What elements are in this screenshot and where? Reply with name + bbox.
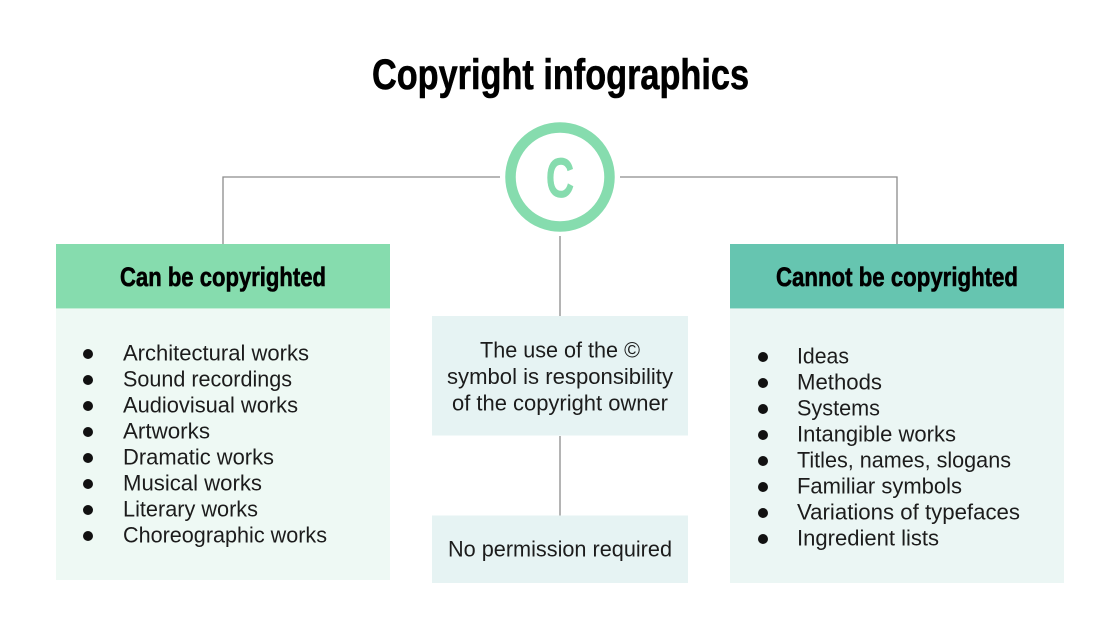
list: non-copyrightable items xyxy=(758,344,1020,550)
list: copyrightable works: Artworks xyxy=(123,418,210,444)
connector: circle to right panel xyxy=(620,177,897,244)
callout: no permission required: No permission required xyxy=(448,536,672,562)
list: copyrightable works: Musical works xyxy=(123,470,262,496)
list: non-copyrightable items: Titles, names, slogans xyxy=(797,448,1011,472)
callout: symbol responsibility: of the copyright owner xyxy=(452,390,668,416)
title: Copyright infographics xyxy=(372,51,749,99)
list: copyrightable works: Audiovisual works xyxy=(123,392,298,418)
panel: cannot be copyrighted xyxy=(730,244,1064,583)
list: non-copyrightable items: Systems xyxy=(797,396,880,420)
callout: symbol responsibility xyxy=(432,316,688,436)
connector: circle to left panel xyxy=(223,177,500,244)
panel header: Can be copyrighted xyxy=(120,262,326,292)
panel header: Cannot be copyrighted xyxy=(776,262,1018,292)
connector: circle to usage box xyxy=(559,236,561,316)
panel body xyxy=(730,309,1064,583)
panel body xyxy=(56,309,390,580)
list: copyrightable works: Sound recordings xyxy=(123,366,292,392)
list: non-copyrightable items: Intangible works xyxy=(797,422,956,446)
icon: copyright circle xyxy=(510,128,610,226)
panel: can be copyrighted xyxy=(56,244,390,580)
panel header xyxy=(730,244,1064,308)
list: copyrightable works xyxy=(83,340,327,548)
list: copyrightable works: Choreographic works xyxy=(123,522,327,548)
icon: copyright circle: C xyxy=(546,146,574,209)
list: non-copyrightable items: Familiar symbols xyxy=(797,474,962,498)
panel header xyxy=(56,244,390,308)
list: non-copyrightable items: Methods xyxy=(797,370,882,394)
callout: no permission required xyxy=(432,516,688,583)
callout: symbol responsibility: symbol is responsibility xyxy=(447,364,673,389)
list: non-copyrightable items: Ideas xyxy=(797,344,849,368)
connector: usage box to permission box xyxy=(559,436,561,516)
list: copyrightable works: Architectural works xyxy=(123,340,309,366)
list: copyrightable works: Literary works xyxy=(123,496,258,522)
callout: symbol responsibility: The use of the © xyxy=(480,338,640,362)
list: copyrightable works: Dramatic works xyxy=(123,444,274,470)
list: non-copyrightable items: Variations of typefaces xyxy=(797,500,1020,524)
list: non-copyrightable items: Ingredient lists xyxy=(797,526,939,550)
